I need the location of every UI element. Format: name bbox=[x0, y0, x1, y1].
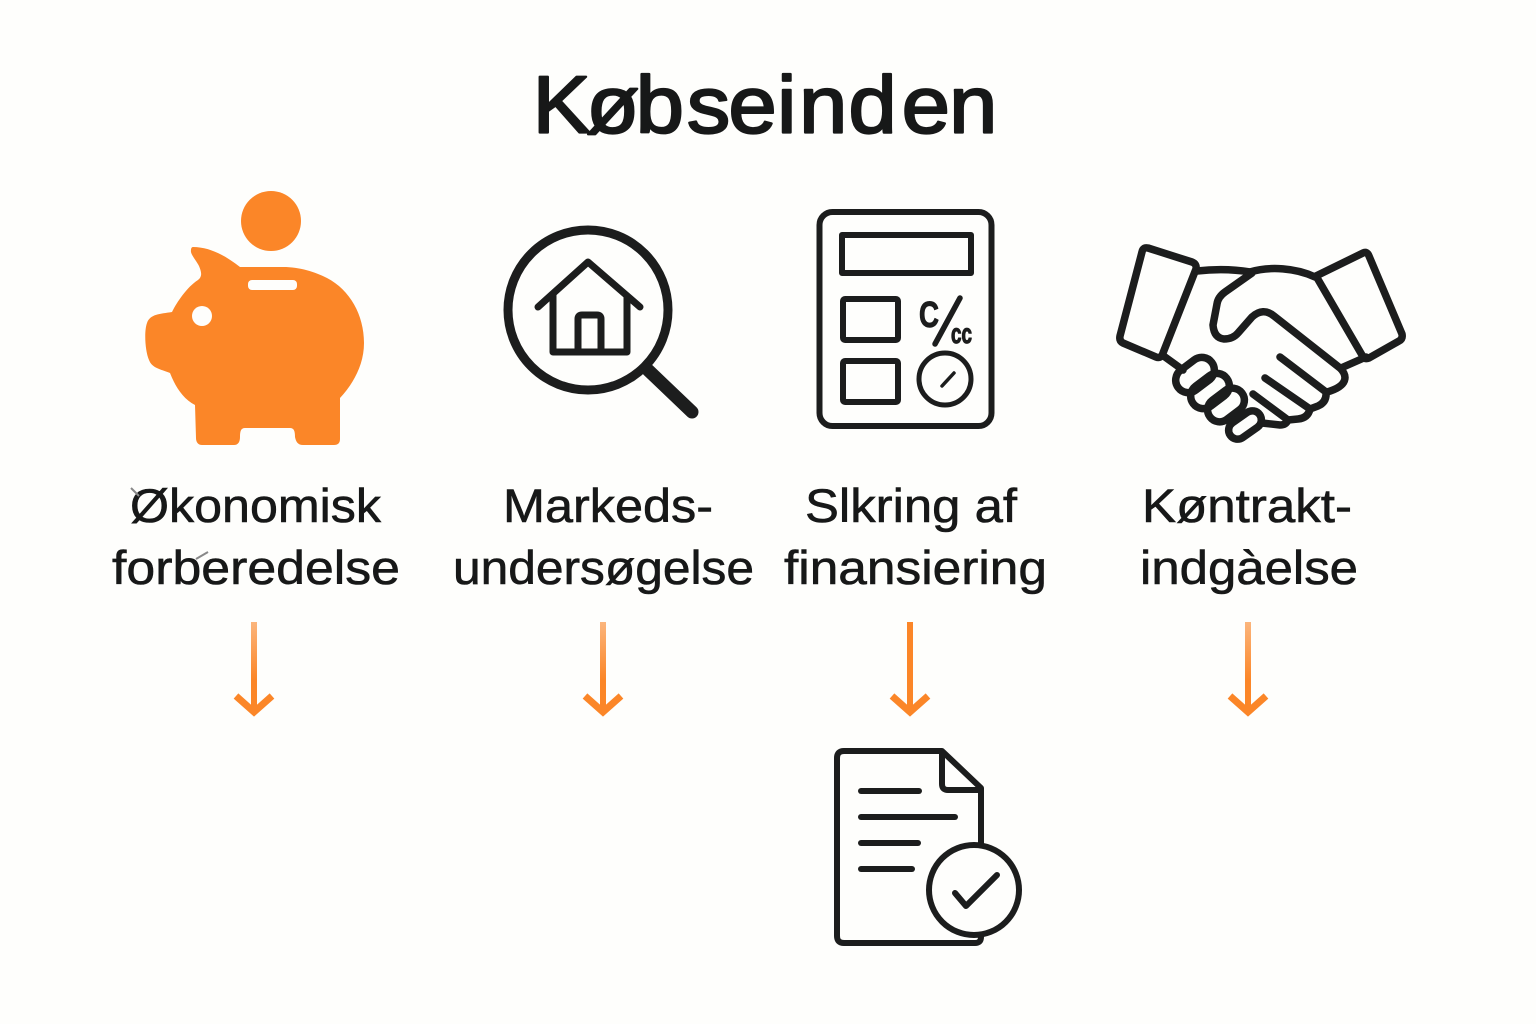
icon: piggy bank with coin bbox=[145, 191, 364, 445]
icon: calculator bbox=[820, 212, 992, 426]
left knuckles bbox=[1171, 352, 1265, 443]
arrow 2 bbox=[585, 622, 621, 712]
label: Markeds-undersøgelse: Markeds- bbox=[503, 479, 713, 532]
top of hands bbox=[1197, 269, 1315, 277]
arrow 1 bbox=[236, 622, 272, 712]
coin slot bbox=[248, 280, 297, 290]
house roof bbox=[538, 262, 640, 307]
document outline bbox=[837, 751, 981, 943]
label: Køntrakt-indgàelse: indgàelse bbox=[1140, 541, 1358, 594]
label: Økonomisk forberedelse: Økonomisk bbox=[130, 479, 382, 532]
left cuff bbox=[1120, 248, 1196, 358]
pig eye bbox=[192, 306, 212, 326]
label: Slkring af finansiering: Slkring af bbox=[805, 479, 1018, 532]
dial needle bbox=[942, 373, 954, 386]
percent slash bbox=[935, 298, 960, 344]
dial bbox=[919, 353, 971, 405]
percent letter C: C bbox=[919, 294, 939, 335]
arrow 3 bbox=[892, 622, 928, 712]
label: Markeds-undersøgelse bbox=[453, 479, 754, 594]
pig body bbox=[145, 247, 364, 445]
icon: handshake bbox=[1120, 248, 1402, 443]
right cuff bbox=[1316, 252, 1402, 359]
coin bbox=[241, 191, 301, 251]
arrow 4 bbox=[1230, 622, 1266, 712]
left wrist bbox=[1165, 357, 1183, 370]
icon: contract document with check bbox=[837, 751, 1019, 943]
magnifier ring bbox=[508, 230, 668, 390]
calculator key top bbox=[843, 299, 898, 340]
house door bbox=[578, 315, 601, 352]
calculator display bbox=[842, 235, 971, 273]
percent letters cc: cc bbox=[951, 318, 972, 349]
thumb and right hand bbox=[1213, 273, 1345, 392]
right wrist bbox=[1341, 357, 1366, 368]
title: Købseinden bbox=[533, 59, 997, 150]
label: Køntrakt-indgàelse bbox=[1140, 479, 1358, 594]
label: Slkring af finansiering bbox=[784, 479, 1047, 594]
magnifier handle bbox=[648, 370, 692, 412]
calculator key bottom bbox=[843, 361, 898, 402]
label: Økonomisk forberedelse: forberedelse bbox=[112, 541, 400, 594]
text lines bbox=[861, 791, 955, 869]
calculator body bbox=[820, 212, 992, 426]
check mark bbox=[955, 875, 997, 906]
icon: magnifier over house bbox=[508, 230, 692, 412]
label: Køntrakt-indgàelse: Køntrakt- bbox=[1142, 479, 1352, 532]
check badge bbox=[929, 845, 1019, 935]
label: Slkring af finansiering: finansiering bbox=[784, 541, 1047, 594]
label: Markeds-undersøgelse: undersøgelse bbox=[453, 541, 754, 594]
right fingers bbox=[1265, 357, 1326, 409]
house walls bbox=[553, 294, 627, 352]
label: Økonomisk forberedelse bbox=[112, 479, 400, 594]
